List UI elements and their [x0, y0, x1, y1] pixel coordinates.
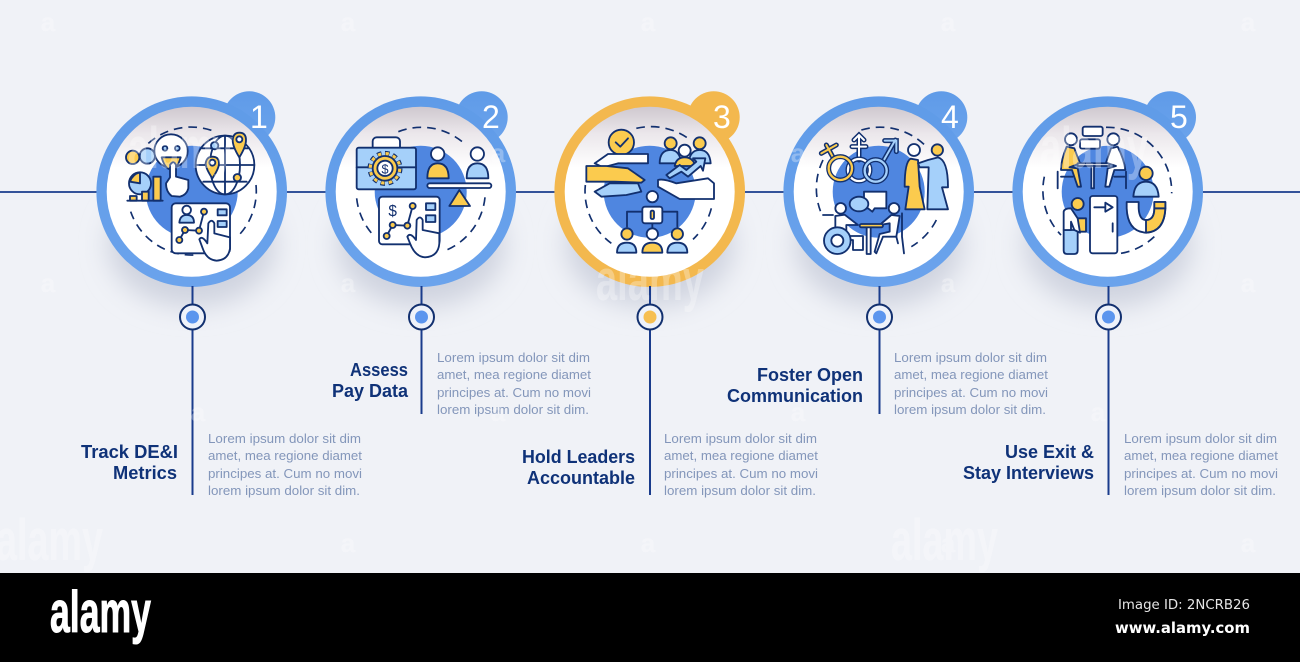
- text block: Assess Pay Data: Assess: [350, 359, 408, 380]
- badge number 4: 4: [941, 99, 959, 135]
- image id: Image ID: 2NCRB26: [1118, 597, 1250, 613]
- watermarks: alamy: [891, 508, 998, 573]
- watermarks: a: [341, 7, 356, 37]
- watermarks: a: [191, 397, 206, 427]
- text block: Track DE&I Metrics: amet, mea regione diamet: [208, 448, 362, 463]
- text block: Assess Pay Data: Lorem ipsum dolor sit dim: [437, 350, 590, 365]
- text block: Hold Leaders Accountable: amet, mea regione diamet: [664, 448, 818, 463]
- icon: pay data: [357, 127, 491, 257]
- icon: accountable leaders: [585, 127, 714, 253]
- text block: Track DE&I Metrics: principes at. Cum no movi: [208, 466, 362, 481]
- watermarks: a: [641, 528, 656, 558]
- panel: step 2 circle: [325, 91, 516, 307]
- panel: step 4 circle: [783, 91, 974, 307]
- badge number 1: 1: [250, 99, 268, 135]
- text block: Foster Open Communication: Foster Open: [757, 364, 863, 385]
- text block: Hold Leaders Accountable: Accountable: [527, 467, 635, 488]
- text block: Foster Open Communication: principes at. Cum no movi: [894, 385, 1048, 400]
- step 5 connector: [1096, 286, 1121, 495]
- text block: Assess Pay Data: amet, mea regione diamet: [437, 367, 591, 382]
- icon: pay data: $: [381, 162, 389, 176]
- watermarks: a: [491, 397, 506, 427]
- text block: Assess Pay Data: Pay Data: [332, 380, 409, 401]
- step 1 connector: [180, 286, 205, 495]
- text block: Use Exit & Stay Interviews: amet, mea regione diamet: [1124, 448, 1278, 463]
- text block: Hold Leaders Accountable: Lorem ipsum dolor sit dim: [664, 431, 817, 446]
- watermarks: a: [1241, 528, 1256, 558]
- text block: Foster Open Communication: amet, mea regione diamet: [894, 367, 1048, 382]
- text block: Use Exit & Stay Interviews: lorem ipsum dolor sit dim.: [1124, 483, 1276, 498]
- horizontal timeline: [0, 191, 1300, 193]
- text block: Hold Leaders Accountable: [522, 431, 818, 498]
- watermarks: a: [941, 268, 956, 298]
- alamy logo: alamy: [50, 580, 151, 645]
- website: www.alamy.com: [1115, 619, 1250, 637]
- watermarks: alamy: [128, 116, 233, 181]
- text block: Use Exit & Stay Interviews: [963, 431, 1278, 498]
- text block: Assess Pay Data: principes at. Cum no movi: [437, 385, 591, 400]
- icon: open communication: [816, 127, 948, 254]
- text block: Foster Open Communication: [727, 350, 1048, 417]
- watermarks: a: [1241, 268, 1256, 298]
- badge number 2: 2: [482, 99, 500, 135]
- watermarks: a: [1241, 7, 1256, 37]
- text block: Use Exit & Stay Interviews: Lorem ipsum dolor sit dim: [1124, 431, 1277, 446]
- watermarks: a: [941, 528, 956, 558]
- watermarks: a: [1091, 397, 1106, 427]
- badge number 3: 3: [713, 99, 731, 135]
- watermarks: a: [791, 138, 806, 168]
- text block: Track DE&I Metrics: lorem ipsum dolor sit dim.: [208, 483, 360, 498]
- text block: Assess Pay Data: [332, 350, 591, 417]
- text block: Track DE&I Metrics: Metrics: [113, 462, 177, 483]
- text block: Use Exit & Stay Interviews: Use Exit &: [1005, 441, 1094, 462]
- icon: pay data: $: [388, 203, 397, 220]
- watermarks: a: [41, 7, 56, 37]
- text block: Foster Open Communication: Communication: [727, 385, 863, 406]
- text block: Track DE&I Metrics: Track DE&I: [81, 441, 178, 462]
- text block: Assess Pay Data: lorem ipsum dolor sit dim.: [437, 402, 589, 417]
- text block: Track DE&I Metrics: Lorem ipsum dolor sit dim: [208, 431, 361, 446]
- watermarks: alamy: [596, 248, 704, 313]
- watermarks: a: [641, 7, 656, 37]
- text block: Hold Leaders Accountable: lorem ipsum dolor sit dim.: [664, 483, 816, 498]
- text block: Use Exit & Stay Interviews: Stay Interviews: [963, 462, 1094, 483]
- watermarks: a: [941, 7, 956, 37]
- watermarks: a: [341, 268, 356, 298]
- watermarks: a: [791, 397, 806, 427]
- badge number 5: 5: [1170, 99, 1188, 135]
- text block: Hold Leaders Accountable: Hold Leaders: [522, 446, 635, 467]
- step 4 connector: [867, 286, 892, 414]
- step 3 connector: [638, 286, 662, 495]
- panel: step 3 circle: [554, 91, 745, 307]
- text block: Track DE&I Metrics: [81, 431, 362, 498]
- text block: Foster Open Communication: lorem ipsum dolor sit dim.: [894, 402, 1046, 417]
- watermarks: alamy: [1040, 116, 1148, 181]
- icon: exit and stay interviews: [1043, 127, 1172, 254]
- panel: step 1 circle: [96, 91, 287, 307]
- step 2 connector: [409, 286, 434, 414]
- text block: Hold Leaders Accountable: principes at. Cum no movi: [664, 466, 818, 481]
- watermarks: a: [41, 268, 56, 298]
- footer bar: [0, 573, 1300, 662]
- icon: metrics: [126, 127, 256, 261]
- text block: Use Exit & Stay Interviews: principes at. Cum no movi: [1124, 466, 1278, 481]
- watermarks: a: [341, 528, 356, 558]
- watermarks: a: [491, 138, 506, 168]
- text block: Foster Open Communication: Lorem ipsum dolor sit dim: [894, 350, 1047, 365]
- panel: step 5 circle: [1012, 91, 1203, 307]
- watermarks: alamy: [0, 508, 103, 573]
